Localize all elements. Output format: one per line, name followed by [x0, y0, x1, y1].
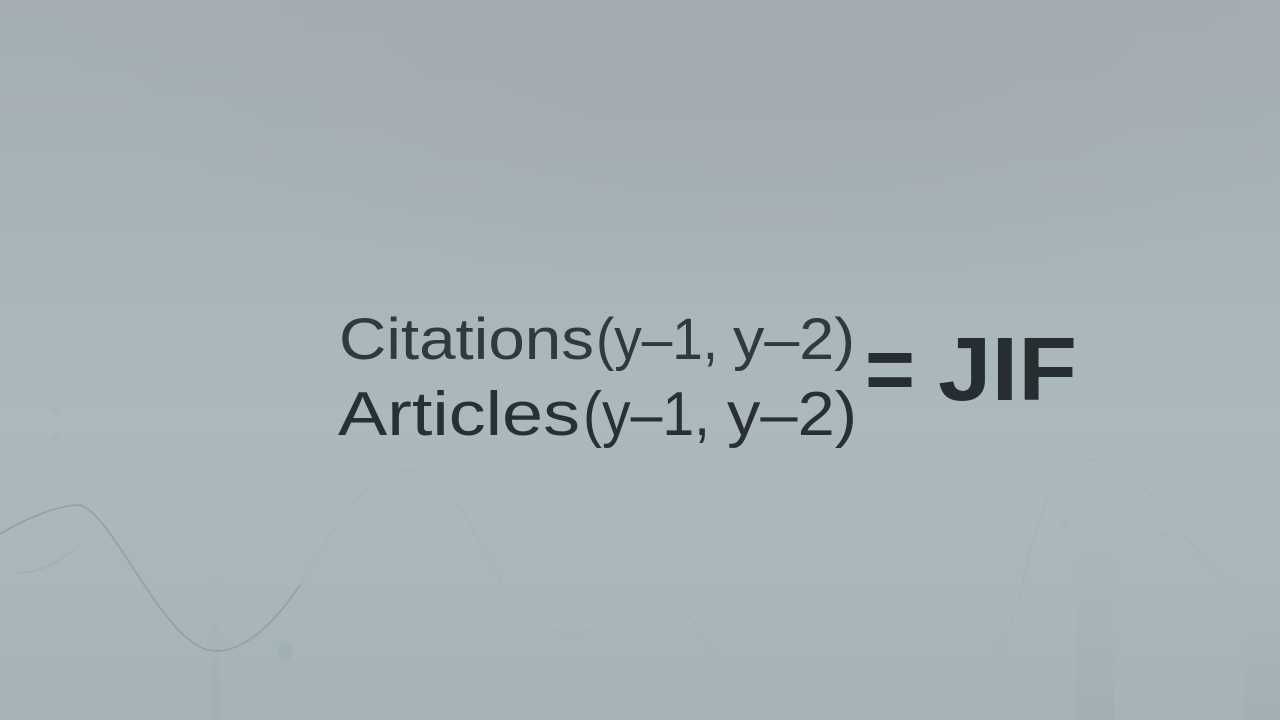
numerator: citations: y–2) — [733, 307, 855, 372]
numerator: citations: (y–1, — [596, 307, 718, 372]
result: JIF: JIF — [938, 320, 1077, 420]
faint markers — [51, 406, 1167, 660]
denominator: articles: Articles — [338, 380, 580, 449]
small faint curve — [18, 550, 74, 573]
main visible wave line, left — [0, 505, 300, 651]
faint wave line, full width — [300, 460, 1280, 695]
denominator: articles: y–2) — [727, 380, 857, 449]
faint vertical bands — [211, 540, 1280, 720]
denominator: articles: (y–1, — [583, 380, 710, 449]
numerator: citations: Citations — [339, 307, 594, 372]
equals sign: = — [865, 320, 915, 420]
